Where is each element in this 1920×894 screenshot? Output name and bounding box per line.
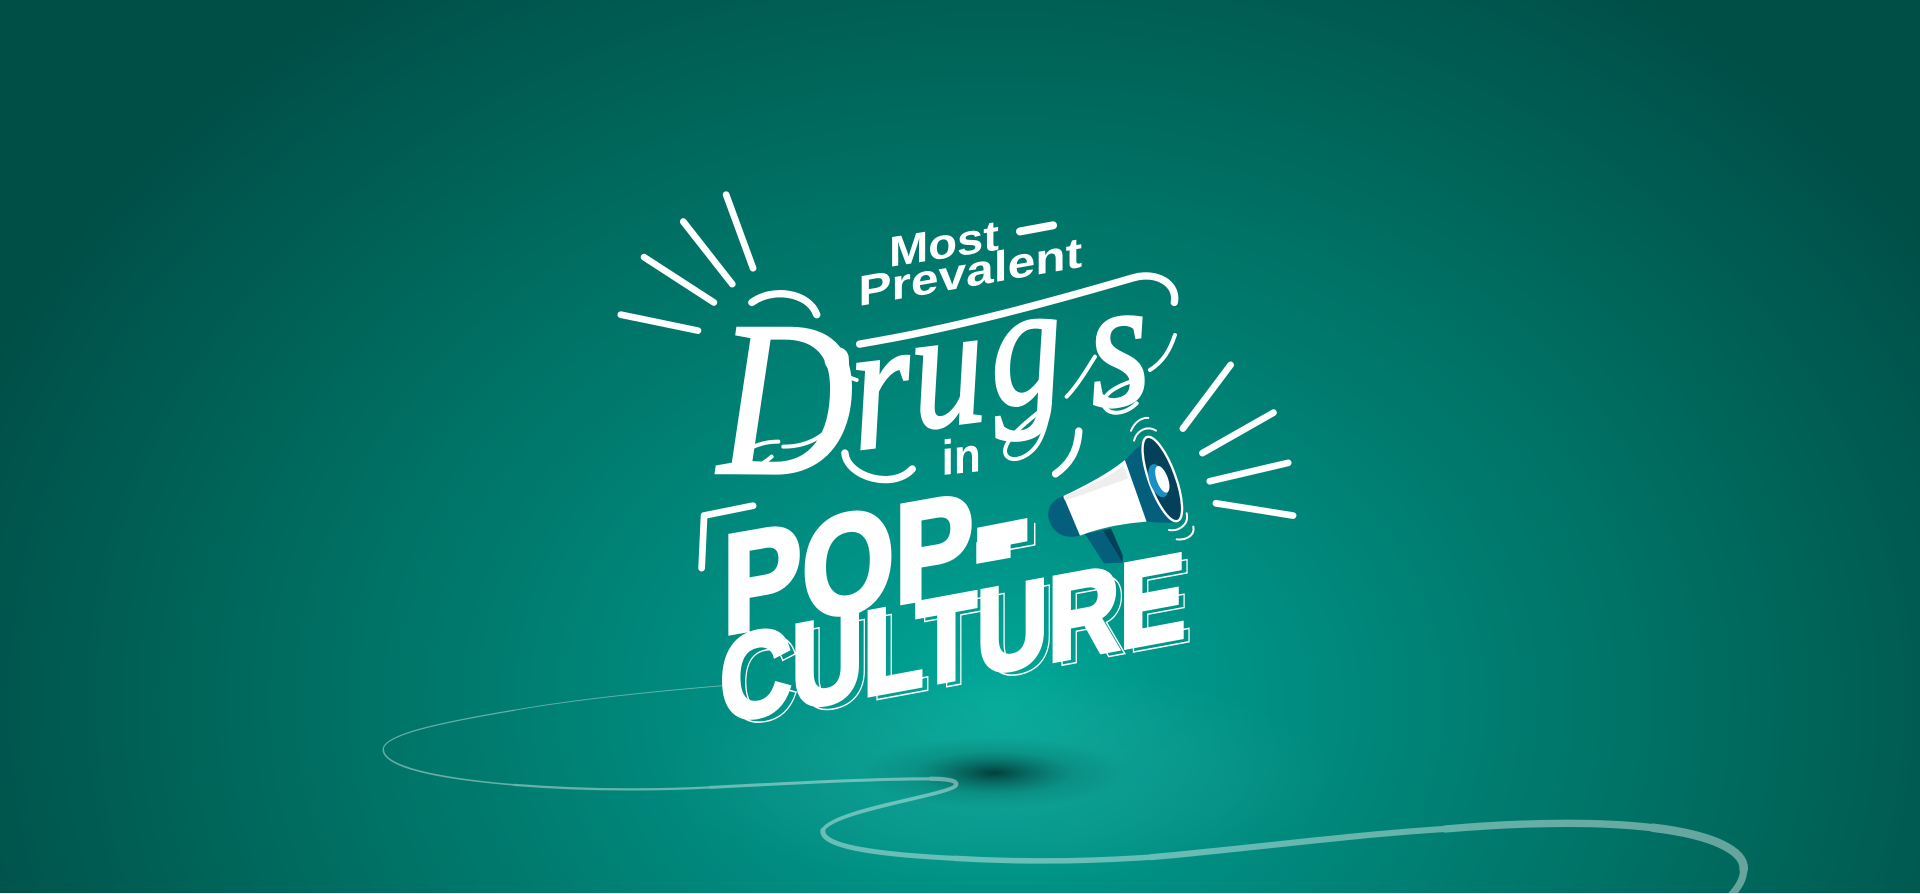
rays: right bbox=[1183, 365, 1293, 516]
heading: CULTURE: CULTURE bbox=[720, 529, 1186, 748]
handle bbox=[1085, 530, 1123, 563]
dash outline bbox=[988, 523, 1035, 553]
winding ribbon line bbox=[383, 686, 1744, 894]
swash below Drugs left bbox=[845, 453, 912, 480]
heading: in: in bbox=[942, 427, 981, 486]
CULTURE outline offset: CULTURE bbox=[727, 534, 1193, 753]
bracket left of POP bbox=[702, 506, 753, 568]
back cap bbox=[1048, 496, 1080, 537]
floor glow bbox=[660, 665, 1340, 885]
rays: upper left bbox=[621, 195, 753, 331]
dash block bbox=[977, 518, 1027, 551]
swash below Drugs right bbox=[1056, 431, 1079, 474]
swash above D bbox=[752, 294, 817, 315]
heading: Most: Most bbox=[889, 211, 999, 276]
icon: megaphone bbox=[1048, 418, 1194, 563]
speaker bbox=[1144, 461, 1172, 500]
heading: Prevalent: Prevalent bbox=[858, 228, 1083, 315]
vibration arcs bbox=[1131, 418, 1194, 540]
bell opening bbox=[1135, 432, 1190, 526]
dash accent bbox=[1020, 225, 1053, 231]
heading: Drugs: Drugs bbox=[715, 237, 1157, 521]
drop shadow under title bbox=[859, 737, 1129, 809]
blue band bbox=[1125, 442, 1182, 523]
white body bbox=[1063, 460, 1147, 536]
heading: POP-: POP- bbox=[722, 455, 1013, 664]
swash over Drugs bbox=[860, 276, 1175, 344]
flourishes of the Drugs script bbox=[738, 335, 1175, 468]
title lettering bbox=[621, 195, 1293, 753]
